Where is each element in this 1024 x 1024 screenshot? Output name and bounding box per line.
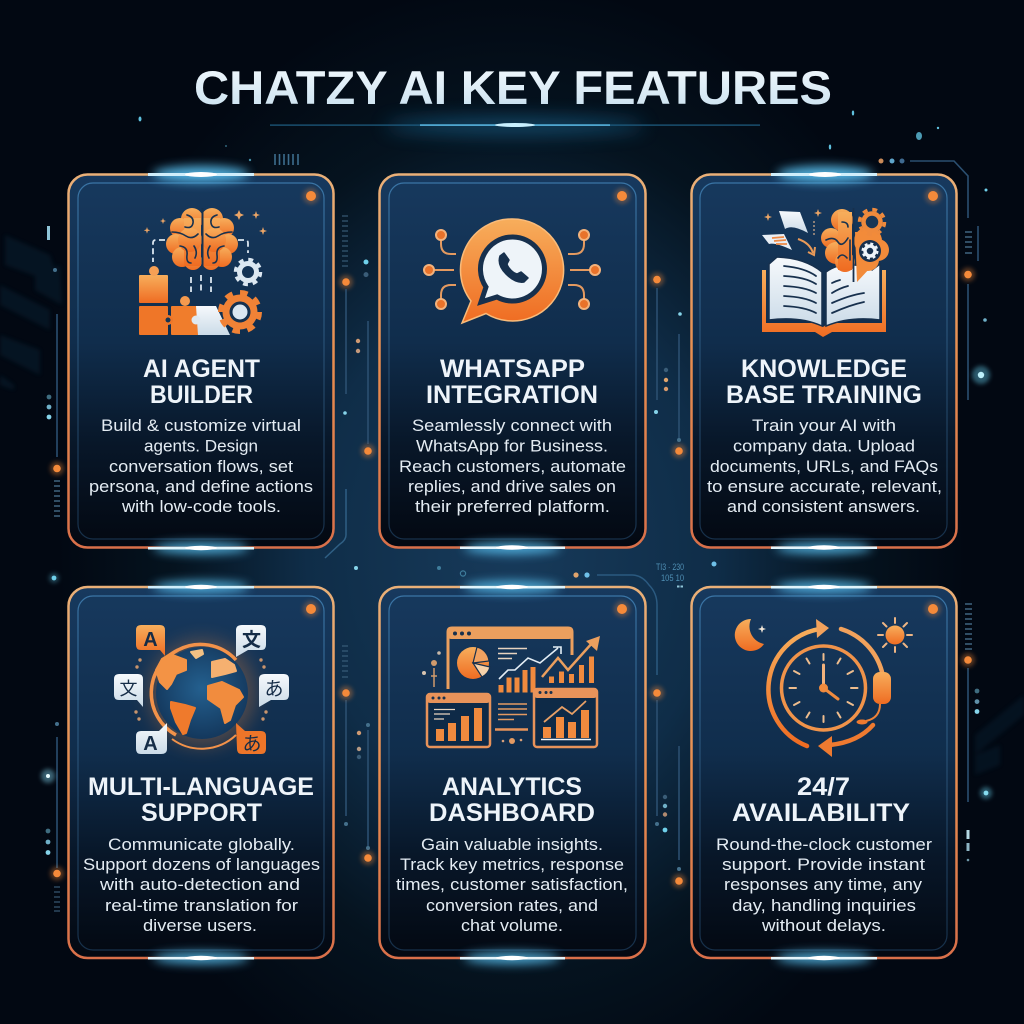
flying papers xyxy=(779,211,808,233)
body text: support. Provide instant xyxy=(722,855,925,874)
top decoration particles xyxy=(138,110,939,165)
puzzle pieces xyxy=(139,266,230,335)
bubble: A orange: A xyxy=(143,629,158,651)
heading: AI AGENT xyxy=(143,355,260,383)
large orange gear xyxy=(220,292,260,332)
body text: chat volume. xyxy=(461,916,563,935)
bubble: left white: 文 xyxy=(120,679,138,699)
body text xyxy=(399,416,626,516)
globe xyxy=(148,639,256,749)
icon: globe with translation bubbles xyxy=(114,625,289,755)
body text: without delays. xyxy=(761,916,886,935)
body text: conversion rates, and xyxy=(426,896,598,915)
gutter decoration left xyxy=(325,216,375,865)
background angled shapes left xyxy=(0,235,62,390)
heading: 24/7 xyxy=(797,773,850,801)
bubble: wen white: 文 xyxy=(242,629,261,651)
body text: with low-code tools. xyxy=(121,497,281,516)
moon xyxy=(735,619,764,651)
book pages xyxy=(769,257,822,326)
body text: company data. Upload xyxy=(733,436,915,456)
icon: open book with brain xyxy=(762,208,889,337)
body text: times, customer satisfaction, xyxy=(396,875,628,894)
brain xyxy=(166,208,238,270)
centre lines xyxy=(498,704,527,720)
body text: Seamlessly connect with xyxy=(412,416,612,435)
body text: real-time translation for xyxy=(105,896,298,915)
body text: to ensure accurate, relevant, xyxy=(707,477,942,496)
body text: Round-the-clock customer xyxy=(716,835,932,854)
bubble: wen white xyxy=(236,625,266,657)
centre gutter circuit and code text: 105 10 xyxy=(661,573,684,584)
orange bubble xyxy=(460,219,564,323)
body text: replies, and drive sales on xyxy=(408,477,616,496)
clock xyxy=(782,646,866,730)
white phone bubble xyxy=(480,237,544,302)
panel: WhatsApp Integration xyxy=(380,174,646,554)
panel: Multi-Language Support xyxy=(68,581,334,964)
heading xyxy=(726,355,922,409)
background angled shapes right xyxy=(975,695,1024,775)
bubble: left white xyxy=(114,674,143,707)
icon: brain with puzzle pieces and gears xyxy=(139,208,267,335)
right window xyxy=(534,689,597,747)
card frame xyxy=(68,166,334,554)
card frame xyxy=(692,166,956,554)
small white gear xyxy=(236,260,260,284)
body text: Gain valuable insights. xyxy=(421,835,603,854)
body text: Reach customers, automate xyxy=(399,457,626,476)
connector dots xyxy=(134,658,268,721)
panel: Knowledge Base Training xyxy=(692,166,956,554)
heading: KNOWLEDGE xyxy=(741,355,907,383)
pie chart xyxy=(457,647,490,679)
heading: BASE TRAINING xyxy=(726,381,922,409)
title: CHATZY AI KEY FEATURES xyxy=(194,61,832,114)
body text: diverse users. xyxy=(143,916,257,935)
top right circuit xyxy=(878,158,968,218)
bubble: right white hiragana xyxy=(259,674,289,707)
body text: Build & customize virtual xyxy=(101,416,301,435)
body text: Support dozens of languages xyxy=(83,855,320,874)
body text: day, handling inquiries xyxy=(732,896,916,915)
text lines xyxy=(498,648,527,658)
heading xyxy=(426,355,598,409)
gutter decoration right xyxy=(650,273,686,888)
orange trend arrow xyxy=(542,642,593,677)
body text: their preferred platform. xyxy=(415,497,610,516)
centre gutter circuit and code text xyxy=(437,562,716,675)
bubble: right white hiragana: あ xyxy=(264,679,284,700)
body text: with auto-detection and xyxy=(99,875,300,894)
sparkles xyxy=(144,210,267,235)
connector dashes xyxy=(153,240,248,292)
left side decoration xyxy=(41,226,64,911)
body text: and consistent answers. xyxy=(727,497,920,516)
left window xyxy=(427,694,490,747)
book cover xyxy=(762,270,886,337)
book text lines xyxy=(784,266,864,313)
rising bars xyxy=(498,656,594,692)
brain half with gears xyxy=(821,208,889,282)
curved arrow xyxy=(798,239,815,255)
left decor xyxy=(422,651,441,687)
panel: AI Agent Builder xyxy=(68,166,334,554)
body text: documents, URLs, and FAQs xyxy=(710,457,938,476)
body text: agents. Design xyxy=(144,436,258,456)
heading: INTEGRATION xyxy=(426,381,598,409)
body text xyxy=(89,416,313,516)
card frame xyxy=(380,581,646,964)
body text: responses any time, any xyxy=(724,875,923,894)
heading: WHATSAPP xyxy=(440,355,585,383)
bubble: A white xyxy=(136,723,167,755)
body text: persona, and define actions xyxy=(89,477,313,496)
card frame xyxy=(380,174,646,554)
body text: Communicate globally. xyxy=(108,835,295,854)
panel: 24/7 Availability xyxy=(692,581,956,964)
heading xyxy=(732,773,910,827)
body text xyxy=(716,835,932,935)
body text: WhatsApp for Business. xyxy=(416,436,608,456)
body text: conversation flows, set xyxy=(109,457,293,476)
card frame xyxy=(692,581,956,964)
heading xyxy=(429,773,595,827)
headset xyxy=(873,672,891,704)
centre gutter circuit and code text: TI3 · 230 xyxy=(656,562,684,573)
right side decoration xyxy=(961,188,992,861)
body text xyxy=(707,416,942,516)
connector nodes xyxy=(434,240,590,299)
body text: Track key metrics, response xyxy=(400,855,624,874)
heading: BUILDER xyxy=(150,381,253,409)
heading: ANALYTICS xyxy=(442,773,582,801)
card frame xyxy=(68,581,334,964)
body text xyxy=(83,835,320,935)
heading: AVAILABILITY xyxy=(732,799,910,827)
main window xyxy=(448,628,572,689)
panel: Analytics Dashboard xyxy=(380,581,646,964)
star xyxy=(758,625,766,633)
sun xyxy=(878,618,912,652)
heading: MULTI-LANGUAGE xyxy=(88,773,314,801)
icon: dashboard windows with charts xyxy=(422,628,600,747)
heading xyxy=(88,773,314,827)
phone glyph xyxy=(499,253,528,282)
icon: clock with headset, moon and sun xyxy=(735,618,912,757)
body text: Train your AI with xyxy=(752,416,896,435)
sparkles xyxy=(764,209,822,221)
white trend line xyxy=(499,647,561,679)
heading: DASHBOARD xyxy=(429,799,595,827)
icon: WhatsApp chat bubble xyxy=(424,219,600,323)
arrow ring xyxy=(768,629,820,746)
bubble: A orange xyxy=(136,625,165,656)
heading: SUPPORT xyxy=(141,799,262,827)
bubble: A white: A xyxy=(143,733,158,755)
bubble: hiragana orange: あ xyxy=(242,734,262,755)
body text xyxy=(396,835,628,935)
title divider glow xyxy=(270,117,760,135)
bubble: hiragana orange xyxy=(236,723,266,755)
heading xyxy=(143,355,260,409)
